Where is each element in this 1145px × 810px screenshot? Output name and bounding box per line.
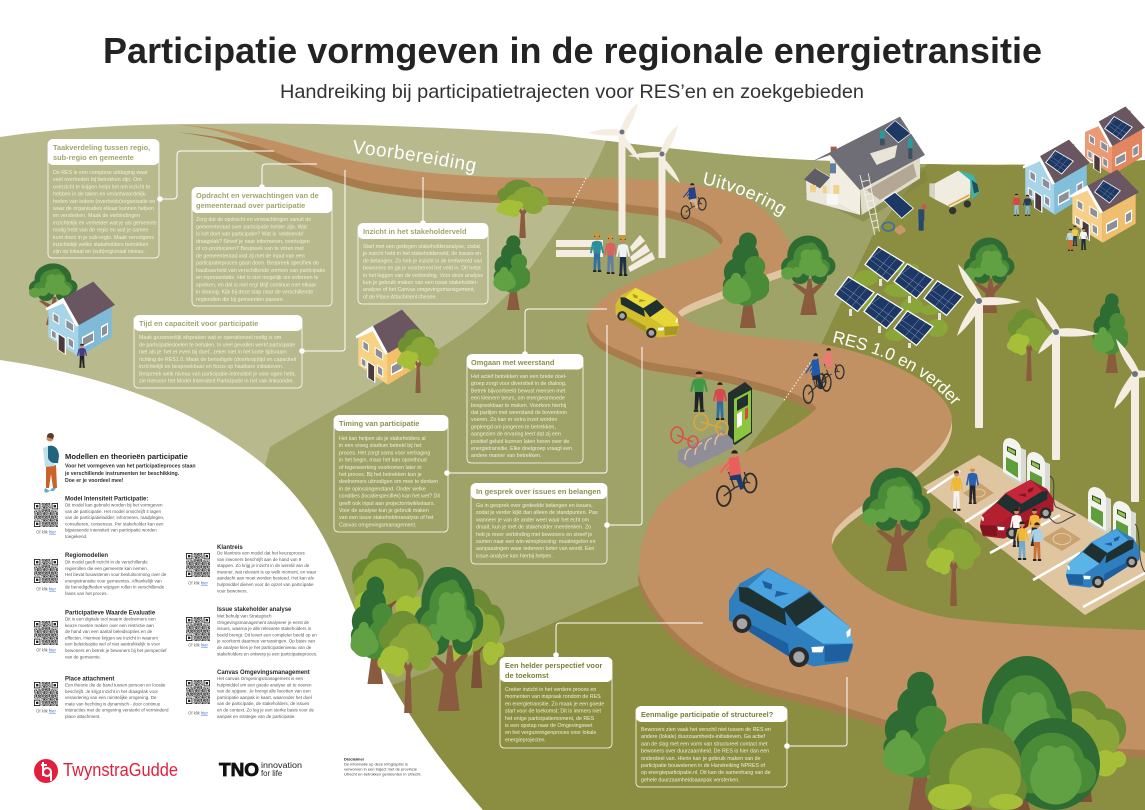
panel: Eenmalige participatie of structureel?: gehele duurzaamheidsaanpak versterken.	[641, 777, 740, 783]
panel: Inzicht in het stakeholderveld: in het leggen van de verbinding. Voor deze analyse	[363, 273, 483, 279]
panel: Eenmalige participatie of structureel?: Eenmalige participatie of structureel?	[641, 710, 774, 719]
panel: Timing van participatie: in de oplossingenstand. Onder welke	[339, 486, 426, 492]
panel: Inzicht in het stakeholderveld: of de Place Attachment-theorie.	[363, 294, 437, 300]
phase label: Uitvoering: Uitvoering	[704, 172, 786, 217]
panel: Opdracht en verwachtingen van de gemeenteraad: in dialoog. Kijk bij deze stap naar de verschillende	[196, 290, 313, 296]
panel: Omgaan met weerstand: bespreekbaar te maken. Voorkom hierbij	[471, 403, 566, 409]
panel: Tijd en capaciteit voor participatie: Bespreek welk niveau van participatie-intensiteit je voor ogen hebt,	[139, 371, 296, 377]
panel: Een helder perspectief voor de toekomst: de toekomst	[505, 671, 549, 680]
large blue electric car	[729, 568, 853, 667]
panel: Tijd en capaciteit voor participatie: Maak gezamenlijk afspraken wat er operationeel nodig is om	[139, 335, 282, 341]
panel: Timing van participatie: Het kan helpen als je stakeholders al	[339, 436, 426, 442]
model: Klantreis: inwoner, wat relevant is op welk moment, en waar	[217, 569, 317, 574]
panel: In gesprek over issues en belangen: In gesprek over issues en belangen	[476, 487, 601, 496]
panel: Taakverdeling tussen regio, sub-regio en gemeente: nodig hebt van de regio en wat je samen	[53, 228, 148, 234]
panel: Opdracht en verwachtingen van de gemeenteraad: spreken, en dat is niet erg! Blijf continue met elkaar	[196, 282, 316, 288]
section: Modellen en theorieën participatie: Modellen en theorieën participatie	[65, 452, 188, 461]
model: Place attachment	[34, 676, 169, 719]
wind turbines: Uitvoering	[588, 103, 680, 258]
panel: Taakverdeling tussen regio, sub-regio en gemeente: Taakverdeling tussen regio,	[53, 143, 150, 152]
parked blue car	[1066, 529, 1139, 588]
bike charging station	[671, 371, 752, 468]
subtitle: Handreiking bij participatietrajecten voor RES’en en zoekgebieden	[280, 81, 864, 103]
model: Participatieve Waarde Evaluatie: Dit is een digitale tool waarin deelnemers een	[65, 616, 156, 622]
large white house with roof workers	[803, 117, 928, 235]
model: Participatieve Waarde Evaluatie: effecten. Hiermee krijgen we inzicht in waarom	[65, 635, 158, 640]
panel: Inzicht in het stakeholderveld: Inzicht in het stakeholderveld	[363, 227, 467, 236]
model: Model Intensiteit Participatie: van de participatieladder; informeren, raadplegen,	[65, 515, 164, 520]
panel: Omgaan met weerstand: Omgaan met weerstand	[471, 358, 555, 367]
panel: Opdracht en verwachtingen van de gemeenteraad: regierollen die bij gemeenten passen.	[196, 297, 284, 303]
panel: Tijd en capaciteit voor participatie: niet als je ‘het er even bij doet’, zeker niet in het korte tijdsraam	[139, 350, 287, 356]
model: Klantreis: van inwoners beschrijft aan de hand van 9	[217, 557, 302, 562]
panel: Eenmalige participatie of structureel?: Bewoners zien vaak het verschil niet tussen de RES en	[641, 727, 771, 733]
panel: Inzicht in het stakeholderveld: Start met een gedegen stakeholderanalyse, zodat	[363, 244, 480, 250]
tree: tall left of road	[493, 235, 531, 310]
section: Modellen en theorieën participatie: je verschillende instrumenten ter beschikking.	[64, 471, 180, 477]
model: Participatieve Waarde Evaluatie: keuze moeten maken over een restrictie aan	[65, 623, 154, 628]
section: Modellen en theorieën participatie: Voor het vormgeven van het participatieproces staan	[65, 464, 196, 470]
panel: Tijd en capaciteit voor participatie: zie hiervoor het Model Intensiteit Participatie in het vak linksonder.	[139, 378, 294, 384]
model: Model Intensiteit Participatie: bijpassende intensiteit van participatie worden	[65, 528, 157, 533]
panel: Eenmalige participatie of structureel?: onderdeel van. Hierin kan je gebruik maken van de	[641, 756, 761, 762]
panel: Eenmalige participatie of structureel?: op energieparticipatie.nl. Dit kan de samenhang van de	[641, 770, 771, 776]
disclaimer: De informatie op deze infographic is	[344, 762, 408, 766]
model: Issue stakeholder analyse: stakeholders en ontwerp je een participatieproces.	[217, 651, 317, 656]
panel: Een helder perspectief voor de toekomst: momenten van inspraak rondom de RES	[505, 694, 601, 700]
house: blue left	[46, 282, 115, 357]
tree: blue house	[29, 263, 78, 325]
logo: TNO: innovation	[261, 761, 302, 770]
model: Canvas Omgevingsmanagement	[186, 670, 315, 719]
model: Klantreis: voor bewoners.	[217, 588, 248, 593]
house: yellow middle	[356, 310, 423, 385]
panel: Taakverdeling tussen regio, sub-regio en gemeente: De RES is een complexe uitdaging waar	[53, 170, 148, 176]
panel: Een helder perspectief voor de toekomst: het enige participatiemoment, de RES	[505, 716, 595, 722]
panel: Timing van participatie: Timing van participatie	[339, 419, 419, 428]
model: Klantreis: Klantreis	[217, 545, 243, 551]
people at parking	[951, 466, 1043, 561]
panel: Opdracht en verwachtingen van de gemeenteraad: draagvlak? Streef je naar informeren, overtuigen	[196, 239, 310, 245]
model: Place attachment: interacties met de omgeving versterkt of verminderd	[65, 708, 169, 713]
disclaimer: verworven in een traject met de provincie	[344, 766, 418, 772]
panel: Een helder perspectief voor de toekomst: en energietransitie. Zo maak je een goede	[505, 701, 604, 707]
model: Regiomodellen: de benodigdheden wijzigen rollen in verschillende	[65, 585, 165, 590]
panel: Opdracht en verwachtingen van de gemeenteraad: en representatie. Het is niet mogelijk om iedereen te	[196, 275, 319, 281]
panel: Eenmalige participatie of structureel?: participatie bouwstenen in de Handreiking NPRES of	[641, 763, 765, 769]
panel: Taakverdeling tussen regio, sub-regio en gemeente: overzicht te krijgen helpt het om inzicht te	[53, 184, 150, 190]
model: Participatieve Waarde Evaluatie: de hand van een aantal beleidsopties en de	[65, 629, 153, 634]
model: Participatieve Waarde Evaluatie: Participatieve Waarde Evaluatie	[65, 610, 156, 616]
red car	[980, 480, 1053, 539]
panel: Eenmalige participatie of structureel?: bewoners over duurzaamheid. De RES is hier dan een	[641, 749, 769, 755]
panel: Een helder perspectief voor de toekomst: is een opstap naar de Omgevingswet	[505, 723, 593, 729]
panel: Omgaan met weerstand: aangezien de ervaring leert dat zij een	[471, 432, 561, 438]
panel: Omgaan met weerstand: een kleinere beurs, om energiearmoede	[471, 396, 565, 402]
lying turbine blades	[556, 235, 655, 272]
tree: parking small	[926, 517, 981, 606]
model: Place attachment: place attachment.	[65, 714, 101, 719]
panel: Taakverdeling tussen regio, sub-regio en gemeente: waar de organisaties elkaar kunnen helpen	[53, 206, 154, 212]
model: Canvas Omgevingsmanagement: van de participatie, de stakeholders, de issues	[217, 701, 310, 706]
model: Participatieve Waarde Evaluatie: Of klik hier	[36, 648, 56, 652]
logo: TwynstraGudde	[34, 759, 178, 783]
panel: Timing van participatie: proces. Het zorgt soms voor vertraging	[339, 450, 430, 456]
cyclists lower road	[717, 348, 844, 506]
panel: Eenmalige participatie of structureel?: andere (lokale) duurzaamheids-initiatieven. Ga actief	[641, 734, 765, 740]
panel: Timing van participatie: in een vroeg stadium betrekt bij het	[339, 443, 422, 449]
panel: Timing van participatie	[334, 325, 607, 532]
tree cluster: bottom right	[883, 656, 1126, 810]
panel: Inzicht in het stakeholderveld: bewoners en ga je voorbereid het veld in. Dit helpt	[363, 266, 481, 272]
panel: Opdracht en verwachtingen van de gemeenteraad: Opdracht en verwachtingen van de	[196, 191, 319, 200]
panel: Eenmalige participatie of structureel?: aan de slag met een vorm van structureel contact met	[641, 741, 768, 747]
panel: Omgaan met weerstand: gepleegd om jongeren te betrekken,	[471, 424, 556, 430]
model: Participatieve Waarde Evaluatie: van de gemeente.	[65, 654, 101, 659]
model: Regiomodellen: Dit model geeft inzicht in de verschillende	[65, 560, 148, 564]
model: Issue stakeholder analyse: issues, waarna je alle relevante stakeholders in	[217, 626, 312, 631]
logo: TNO: TNO	[219, 760, 259, 780]
wind turbines: RES 1.0	[957, 264, 1145, 502]
panel: Opdracht en verwachtingen van de gemeenteraad	[192, 164, 332, 306]
model: Klantreis: De klantreis een model dat het keuzeproces	[217, 550, 306, 556]
panel: Eenmalige participatie of structureel?	[636, 677, 847, 787]
panel: Omgaan met weerstand: energietransitie. Elke doelgroep vraagt een	[471, 446, 572, 452]
panel: Taakverdeling tussen regio, sub-regio en gemeente: sub-regio en gemeente	[53, 153, 134, 162]
model: Model Intensiteit Participatie	[34, 496, 164, 539]
model: Canvas Omgevingsmanagement: participatie aanpak in kaart, waaronder het doel	[217, 695, 312, 700]
model: Issue stakeholder analyse: Of klik hier	[188, 642, 208, 648]
model: Regiomodellen: Of klik hier	[36, 586, 56, 592]
tree: top center	[496, 180, 549, 238]
model: Issue stakeholder analyse: Omgevingsmanagement analyseer je eerst de	[217, 620, 310, 625]
panel: Omgaan met weerstand	[467, 309, 607, 463]
panel: Omgaan met weerstand: Het actief betrekken van een brede doel-	[471, 374, 567, 380]
panel: Inzicht in het stakeholderveld: kun je gebruik maken van een issue stakeholder-	[363, 280, 478, 286]
panel: Timing van participatie: van een issue stakeholderanalyse of het	[339, 515, 434, 521]
tree: yellow house	[397, 329, 439, 393]
panel: Opdracht en verwachtingen van de gemeenteraad: de gemeenteraad wat zij met de input van een	[196, 253, 305, 259]
panel: In gesprek over issues en belangen: aanpassingen waar iedereen beter van wordt. Een	[476, 546, 594, 552]
panel: Timing van participatie: het proces. Bij het betrekken kun je	[339, 472, 422, 478]
panel: Omgaan met weerstand: positief geluid kunnen laten horen over de	[471, 439, 569, 445]
tree: parking large	[862, 468, 930, 571]
panel: Opdracht en verwachtingen van de gemeenteraad: haalbaarheid van verschillende vormen van participatie	[196, 268, 325, 274]
panel: Een helder perspectief voor de toekomst: start voor de toekomst: Dit is immers niet	[505, 709, 601, 715]
panel: Inzicht in het stakeholderveld: je inzicht hebt in het stakeholderveld, de issues en	[362, 251, 481, 257]
panel: Timing van participatie: condities (locatiespecifiek) kan het wel? Dit	[339, 494, 441, 500]
panel: Timing van participatie: deelnemers uitnodigen om mee te denken	[339, 479, 438, 485]
section: Modellen en theorieën participatie: Doe er je voordeel mee!	[65, 478, 124, 484]
panel: Inzicht in het stakeholderveld: de belangen. Zo heb je inzicht in de leefwereld van	[363, 258, 482, 264]
model: Place attachment: Een theorie die de band tussen persoon en locatie	[65, 682, 166, 688]
model: Canvas Omgevingsmanagement: Of klik hier	[188, 710, 208, 716]
house: yellow right	[1070, 170, 1139, 243]
panel: Timing van participatie: geeft ook input aan projectontwikkelaars.	[339, 501, 435, 507]
title: Participatie vormgeven in de regionale energietransitie	[103, 30, 1042, 71]
panel: Een helder perspectief voor de toekomst: en het vergunningenproces voor lokale	[505, 730, 596, 736]
panel: Een helder perspectief voor de toekomst	[500, 623, 703, 748]
model: Regiomodellen	[34, 553, 167, 596]
phase label: RES 1.0 en verder: RES 1.0 en verder	[833, 331, 960, 404]
parking lot	[923, 455, 1145, 615]
model: Model Intensiteit Participatie: van de participatie. Het model omschrijft 4 lagen	[65, 509, 162, 514]
model: Place attachment: beschrijft. Je krijgt inzicht in het draagvlak voor	[65, 689, 159, 694]
panel: Inzicht in het stakeholderveld: analyse of het Canvas omgevingsmanagement,	[363, 287, 475, 293]
EV chargers	[1002, 438, 1145, 572]
residents talking	[1013, 194, 1087, 251]
model: Place attachment: Of klik hier	[36, 708, 56, 714]
panel: Taakverdeling tussen regio, sub-regio en gemeente	[48, 139, 274, 258]
section: Modellen en theorieën participatie	[64, 452, 196, 484]
model: Canvas Omgevingsmanagement: Het canvas Omgevingsmanagement is een	[217, 676, 304, 681]
model: Model Intensiteit Participatie: Model Intensiteit Participatie:	[65, 496, 148, 502]
person walking	[78, 344, 86, 368]
model: Issue stakeholder analyse: Met behulp van Strategisch	[217, 614, 272, 618]
panel: Opdracht en verwachtingen van de gemeenteraad: gemeenteraad over participatie	[196, 201, 305, 210]
logo: TNO: for life	[261, 769, 282, 778]
panel: Taakverdeling tussen regio, sub-regio en gemeente: kunt doen in je sub-regio. Maak vervolgens	[53, 235, 154, 241]
disclaimer: Utrecht en betrokken gemeenten in Utrecht.	[344, 772, 422, 776]
model: Regiomodellen: Regiomodellen	[65, 553, 108, 559]
panel: In gesprek over issues en belangen: heb je meer verbinding met bewoners en streef je	[476, 532, 592, 538]
model: Canvas Omgevingsmanagement: hulpmiddel om een goede analyse uit te voeren	[217, 682, 312, 687]
panel: Opdracht en verwachtingen van de gemeenteraad: gemeenteraad over participatie helder zijn. Wat	[196, 224, 307, 230]
panel: In gesprek over issues en belangen: Ga in gesprek over gedeelde belangen en issues,	[476, 503, 593, 509]
panel: Omgaan met weerstand: voeren. Zo kan er extra inzet worden	[471, 417, 557, 423]
panel: Een helder perspectief voor de toekomst: Een helder perspectief voor	[505, 661, 602, 670]
panel: Opdracht en verwachtingen van de gemeenteraad: Zorg dat de opdracht en verwachtingen vanuit de	[196, 217, 311, 223]
panel: Taakverdeling tussen regio, sub-regio en gemeente: hebben in de taken en verantwoordelijk-	[53, 192, 147, 198]
cyclist on road	[681, 183, 706, 219]
solar field	[835, 247, 963, 348]
model: Klantreis: Of klik hier	[188, 580, 208, 586]
panel: Timing van participatie: of tegenwerking voorkomen later in	[339, 465, 421, 471]
model: Canvas Omgevingsmanagement: Canvas Omgevingsmanagement	[217, 670, 310, 676]
tree: behind turbines	[964, 238, 1014, 313]
model: Regiomodellen: fases van het proces.	[65, 591, 108, 596]
model: Issue stakeholder analyse	[186, 607, 317, 656]
model: Participatieve Waarde Evaluatie: bewoners en betrek je bewoners bij het perspectief	[65, 648, 167, 653]
panel: Omgaan met weerstand: andere manier van betrekken.	[471, 453, 541, 459]
panel: In gesprek over issues en belangen: draait, kun je met de stakeholder meedenken. Zo	[476, 525, 591, 531]
panel: Tijd en capaciteit voor participatie: inzichtelijk en bespreekbaar en focus op haalbare initiatieven.	[139, 364, 283, 370]
panel: In gesprek over issues en belangen	[471, 347, 642, 564]
disclaimer: Disclaimer	[344, 756, 365, 762]
panel: Taakverdeling tussen regio, sub-regio en gemeente: inzichtelijk welke stakeholders betrokken	[53, 242, 148, 248]
road: winding path	[175, 124, 1145, 758]
model: Model Intensiteit Participatie: toegekend.	[65, 534, 87, 539]
panel: In gesprek over issues en belangen: zodat je verder kijkt dan alleen de standpunten. Pas	[476, 510, 598, 516]
panel: Omgaan met weerstand: groep zorgt voor diversiteit in de dialoog.	[471, 381, 566, 387]
solar houses	[1023, 107, 1145, 243]
panel: Tijd en capaciteit voor participatie: Tijd en capaciteit voor participatie	[139, 319, 258, 328]
model: Model Intensiteit Participatie: consulteren, consensus. Per stakeholder kan een	[65, 521, 164, 526]
tree: far right	[1092, 293, 1129, 373]
panel: Opdracht en verwachtingen van de gemeenteraad: of co-produceren? Bespreek van te voren met	[196, 246, 304, 252]
logo: TwynstraGudde: TwynstraGudde	[63, 760, 178, 780]
model: Issue stakeholder analyse: de analyse kies je het participatieniveau van de	[217, 645, 312, 650]
panel: Taakverdeling tussen regio, sub-regio en gemeente: inzichtelijk en verhelder wat je als gemeente	[53, 220, 157, 226]
model: Klantreis: aandacht aan moet worden besteed. Het kan als	[217, 576, 315, 581]
model: Issue stakeholder analyse: je voorkomt daarmee verrassingen. Op basis van	[216, 639, 316, 644]
panel: Tijd en capaciteit voor participatie: richting de RES1.0. Maak de benodigde (doorloop)tijd en capaciteit	[139, 357, 297, 363]
tree: behind right turbines	[1007, 309, 1051, 381]
model: Canvas Omgevingsmanagement: aanpak en strategie van de participatie.	[217, 714, 296, 719]
panel: Taakverdeling tussen regio, sub-regio en gemeente: zijn op lokaal en (sub)regionaal niveau.	[53, 249, 145, 255]
tree: near house	[781, 236, 835, 315]
panel: In gesprek over issues en belangen: issue-analyse kan hierbij helpen.	[476, 553, 553, 559]
panel: Een helder perspectief voor de toekomst: Creëer inzicht in het verdere proces en	[505, 687, 596, 693]
tree: road wedge	[722, 232, 770, 328]
panel: Taakverdeling tussen regio, sub-regio en gemeente: veel overheden bij betrokken zijn. Om	[53, 177, 142, 183]
phase dividers: dotted lines	[572, 178, 812, 402]
panel: In gesprek over issues en belangen: samen naar een win-winoplossing: maatregelen en	[476, 539, 596, 545]
panel: Een helder perspectief voor de toekomst: energieprojecten.	[505, 737, 546, 743]
panel: Omgaan met weerstand: dat partijen met weerstand de boventoon	[471, 410, 567, 416]
yellow car	[616, 288, 679, 338]
model: Klantreis	[186, 545, 317, 593]
house: blue right	[1023, 140, 1090, 215]
model: Issue stakeholder analyse: beeld brengt. Dit levert een completer beeld op en	[217, 632, 317, 637]
model: Regiomodellen: energietransitie voor gemeentes. Afhankelijk van	[65, 578, 162, 583]
panel: Tijd en capaciteit voor participatie: de participatiedoelen te behalen. In veel gevallen werkt participatie	[139, 342, 295, 348]
panel: In gesprek over issues en belangen: wanneer je van de ander weet waar het echt om	[476, 517, 590, 523]
logo: TNO	[219, 760, 302, 780]
panel: Timing van participatie: Canvas omgevingsmanagement.	[339, 522, 416, 528]
model: Canvas Omgevingsmanagement: van de opgave. Je brengt alle facetten van een	[217, 689, 311, 694]
model: Canvas Omgevingsmanagement: en de context. Zo leg je een sterke basis voor de	[217, 708, 315, 712]
model: Place attachment: verandering van een ruimtelijke omgeving. De	[65, 695, 157, 700]
model: Regiomodellen: Het bevat bouwstenen voor besluitvorming over de	[65, 572, 167, 577]
model: Participatieve Waarde Evaluatie	[34, 610, 167, 659]
model: Model Intensiteit Participatie: Of klik hier	[36, 530, 56, 534]
tree cluster: bottom left	[350, 543, 505, 713]
panel: Taakverdeling tussen regio, sub-regio en gemeente: en versterken. Maak de verbindingen	[53, 213, 140, 219]
model: Place attachment: Place attachment	[65, 676, 114, 682]
panel: Taakverdeling tussen regio, sub-regio en gemeente: heden van iedere (overheids)organisatie en	[53, 199, 155, 205]
model: Issue stakeholder analyse: Issue stakeholder analyse	[217, 607, 292, 613]
model: Klantreis: hulpmiddel dienen voor de opzet van participatie	[217, 582, 314, 587]
panel: Timing van participatie: Voor de analyse kun je gebruik maken	[339, 508, 429, 514]
model: Place attachment: mate van hechting is dynamisch - door continue	[65, 701, 161, 706]
phase label: Voorbereiding: Voorbereiding	[354, 140, 476, 175]
panel: Opdracht en verwachtingen van de gemeenteraad: is het doel van participatie? Wat is ‘voldoende’	[196, 232, 304, 238]
model: Participatieve Waarde Evaluatie: een beleidsoptie wel of niet aantrekkelijk is voor	[65, 642, 161, 647]
panel: Inzicht in het stakeholderveld	[358, 177, 488, 304]
panel: Opdracht en verwachtingen van de gemeenteraad: participatieproces gaan doen. Bespreek specifiek de	[196, 260, 319, 266]
model: Model Intensiteit Participatie: Dit model kan gebruikt worden bij het vormgeven	[65, 502, 163, 508]
panel: Tijd en capaciteit voor participatie	[134, 170, 345, 388]
illustration: person with backpack	[43, 433, 59, 493]
model: Klantreis: stappen. Zo krijg je inzicht in de wereld van de	[217, 563, 310, 568]
house: orange	[1083, 107, 1145, 175]
workers near turbines	[591, 233, 629, 276]
service truck	[929, 171, 980, 214]
panel: Timing van participatie: in het begin, maar het kan oponthoud	[339, 458, 427, 464]
panel: Omgaan met weerstand: Betrek bijvoorbeeld bewust mensen met	[471, 388, 566, 394]
model: Regiomodellen: regierollen die een gemeente kan nemen.	[65, 566, 148, 571]
